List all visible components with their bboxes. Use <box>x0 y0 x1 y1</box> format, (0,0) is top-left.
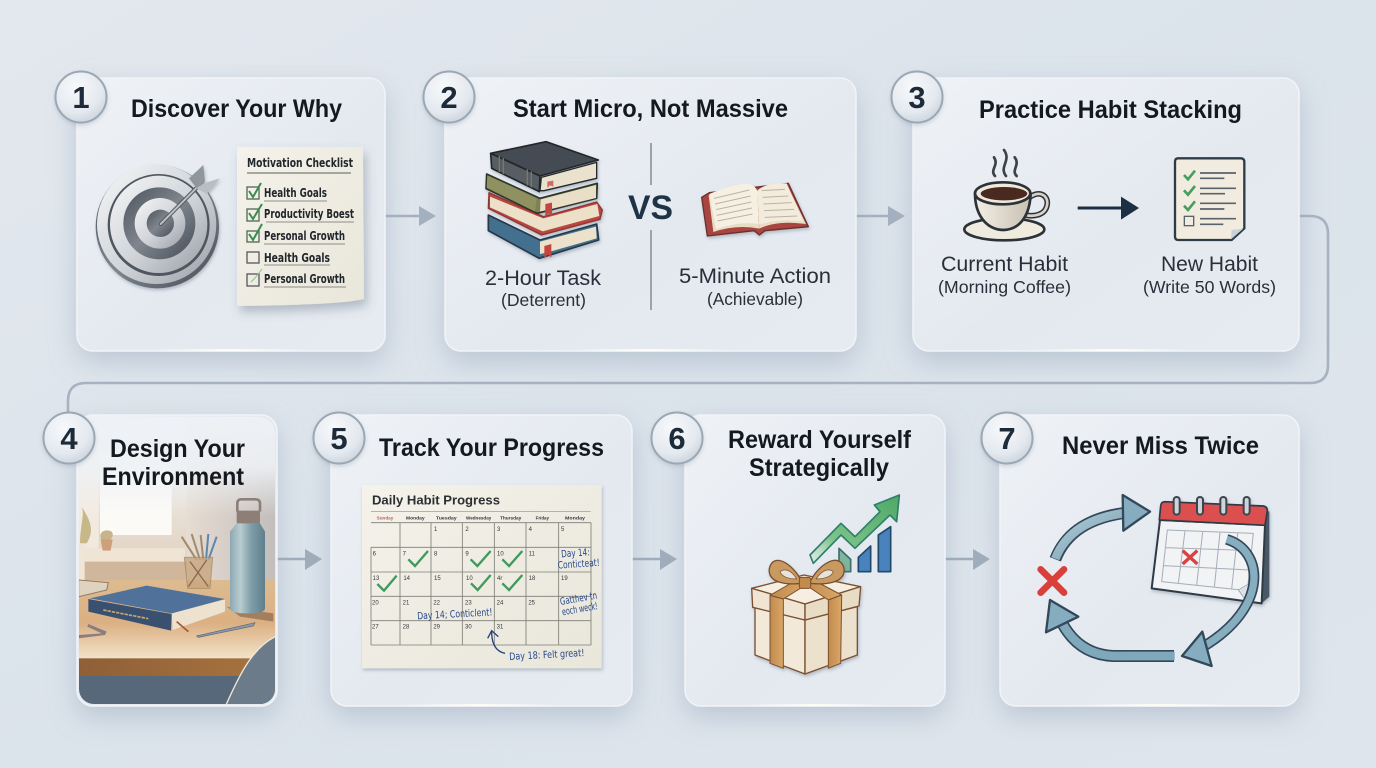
calendar dates: 10 <box>466 576 473 582</box>
arrow: step 5 to 6 <box>632 549 677 570</box>
arrow: current to new habit <box>1078 197 1139 220</box>
calendar dates: 23 <box>465 600 472 606</box>
label: new habit <box>1143 252 1276 297</box>
divider <box>650 143 652 310</box>
calendar dates: 21 <box>403 600 410 606</box>
panel: step 2 start micro <box>424 72 856 352</box>
step number 1: 1 <box>72 80 90 115</box>
step number 7: 7 <box>998 421 1016 456</box>
calendar dates: 19 <box>561 576 568 582</box>
heading: Never Miss Twice <box>1062 432 1259 460</box>
calendar dates: 4r <box>497 576 502 582</box>
weekday labels: Tuesday <box>436 515 457 520</box>
calendar dates: 1 <box>434 527 438 533</box>
calendar dates: 24 <box>497 600 504 606</box>
icon: checklist document <box>1175 158 1244 240</box>
checklist items: Health Goals <box>264 251 330 265</box>
calendar dates: 3 <box>497 527 501 533</box>
handwritten notes: Day 18: Felt great! <box>509 648 585 663</box>
note title: Motivation Checklist <box>247 156 353 170</box>
calendar dates: 22 <box>433 600 441 606</box>
heading <box>102 435 245 491</box>
panel: step 3 habit stacking <box>892 72 1299 352</box>
heading: Environment <box>102 463 245 491</box>
weekday labels: Thursday <box>500 515 522 520</box>
note arrow <box>488 631 505 653</box>
label: current habit <box>938 252 1071 297</box>
checklist items: Health Goals <box>264 186 327 200</box>
weekday labels: Monday <box>565 515 586 520</box>
checklist items: Productivity Boest <box>264 207 354 221</box>
heading: Track Your Progress <box>379 434 604 462</box>
calendar dates: 14 <box>403 576 411 582</box>
calendar dates: 20 <box>372 600 379 606</box>
calendar dates: 9 <box>465 552 469 558</box>
weekday labels: Monday <box>406 515 425 520</box>
calendar dates: 6 <box>373 552 377 558</box>
connector: step 3 to step 4 <box>68 216 1328 418</box>
label: current habit: Current Habit <box>941 252 1068 276</box>
step number 2: 2 <box>440 80 458 115</box>
label: current habit: (Morning Coffee) <box>938 277 1071 297</box>
desk scene illustration <box>79 417 277 706</box>
step number 4 <box>44 412 94 464</box>
checklist items <box>264 186 354 287</box>
icon: target with arrow <box>96 165 220 288</box>
step number 6 <box>652 412 702 464</box>
arrow: step 2 to 3 <box>856 206 905 226</box>
calendar dates: 27 <box>372 625 379 631</box>
label: 5-minute action <box>679 264 831 309</box>
label: 2-hour task: (Deterrent) <box>501 290 586 310</box>
panel: step 6 reward yourself <box>652 412 945 706</box>
calendar dates: 29 <box>433 625 441 631</box>
checklist note <box>237 147 364 306</box>
panel: step 7 never miss twice <box>982 412 1299 706</box>
handwritten notes: eoch weck! <box>561 601 599 618</box>
step number 3: 3 <box>908 80 926 115</box>
label: 2-hour task <box>485 266 601 310</box>
calendar dates: 25 <box>528 600 536 606</box>
vs label: VS <box>628 189 673 227</box>
calendar dates: 8 <box>434 552 438 558</box>
label: new habit: New Habit <box>1161 252 1258 276</box>
heading: Practice Habit Stacking <box>979 96 1242 124</box>
calendar dates: 5 <box>561 527 565 533</box>
calendar title: Daily Habit Progress <box>372 493 500 507</box>
icon: coffee cup <box>964 150 1047 240</box>
handwritten notes: Conticteat! <box>557 558 600 572</box>
icon: calendar with missed day <box>1152 500 1269 603</box>
icon: gift box <box>752 560 861 674</box>
panel: step 1 discover your why <box>56 72 385 352</box>
checklist items: Personal Growth <box>264 229 345 243</box>
heading: Strategically <box>749 454 889 482</box>
checkboxes <box>247 183 262 286</box>
calendar dates <box>372 527 568 631</box>
weekday labels: Sunday <box>377 515 394 520</box>
calendar dates: 30 <box>465 625 472 631</box>
label: new habit: (Write 50 Words) <box>1143 277 1276 297</box>
calendar dates: 7 <box>403 552 407 558</box>
heading: Reward Yourself <box>728 426 912 454</box>
heading: Start Micro, Not Massive <box>513 95 788 123</box>
weekday labels: Friday <box>536 515 550 520</box>
handwritten notes: Day 14: <box>561 547 590 560</box>
icon: open book <box>702 183 808 236</box>
arrow: step 4 to 5 <box>277 549 322 570</box>
step number 6: 6 <box>668 421 686 456</box>
icon: loop arrows and red x <box>1041 495 1254 666</box>
weekday labels: Wednesday <box>466 515 492 520</box>
step number 7 <box>982 412 1032 464</box>
calendar dates: 13 <box>373 576 380 582</box>
handwritten notes: Gatthev tn <box>559 591 598 608</box>
progress calendar <box>362 485 602 668</box>
calendar dates: 10 <box>497 552 504 558</box>
step number 2 <box>424 72 474 122</box>
calendar dates: 4 <box>529 527 533 533</box>
calendar dates: 28 <box>403 625 410 631</box>
handwritten notes: Day 14; Conticlent! <box>417 607 493 622</box>
heading: Discover Your Why <box>131 95 342 123</box>
calendar dates: 15 <box>434 576 441 582</box>
calendar dates: 18 <box>529 576 536 582</box>
calendar dates: 2 <box>465 527 469 533</box>
step number 3 <box>892 72 942 122</box>
heading <box>728 426 912 482</box>
panel: step 4 design your environment <box>44 412 277 706</box>
panel: step 5 track your progress <box>314 412 632 706</box>
calendar dates: 31 <box>497 625 504 631</box>
handwritten notes <box>417 547 600 663</box>
calendar dates: 11 <box>529 552 536 558</box>
step number 5 <box>314 412 364 464</box>
weekday labels <box>377 515 586 520</box>
label: 2-hour task: 2-Hour Task <box>485 266 601 290</box>
label: 5-minute action: 5-Minute Action <box>679 264 831 288</box>
arrow: step 6 to 7 <box>945 549 990 570</box>
icon: growth chart <box>810 495 899 572</box>
step number 5: 5 <box>330 421 348 456</box>
step number 1 <box>56 72 106 122</box>
heading: Design Your <box>110 435 245 463</box>
label: 5-minute action: (Achievable) <box>707 289 803 309</box>
arrow: step 1 to 2 <box>385 206 436 226</box>
checklist items: Personal Growth <box>264 272 345 286</box>
green check marks <box>377 551 522 591</box>
icon: stack of books <box>486 142 602 259</box>
step number 4: 4 <box>60 421 78 456</box>
